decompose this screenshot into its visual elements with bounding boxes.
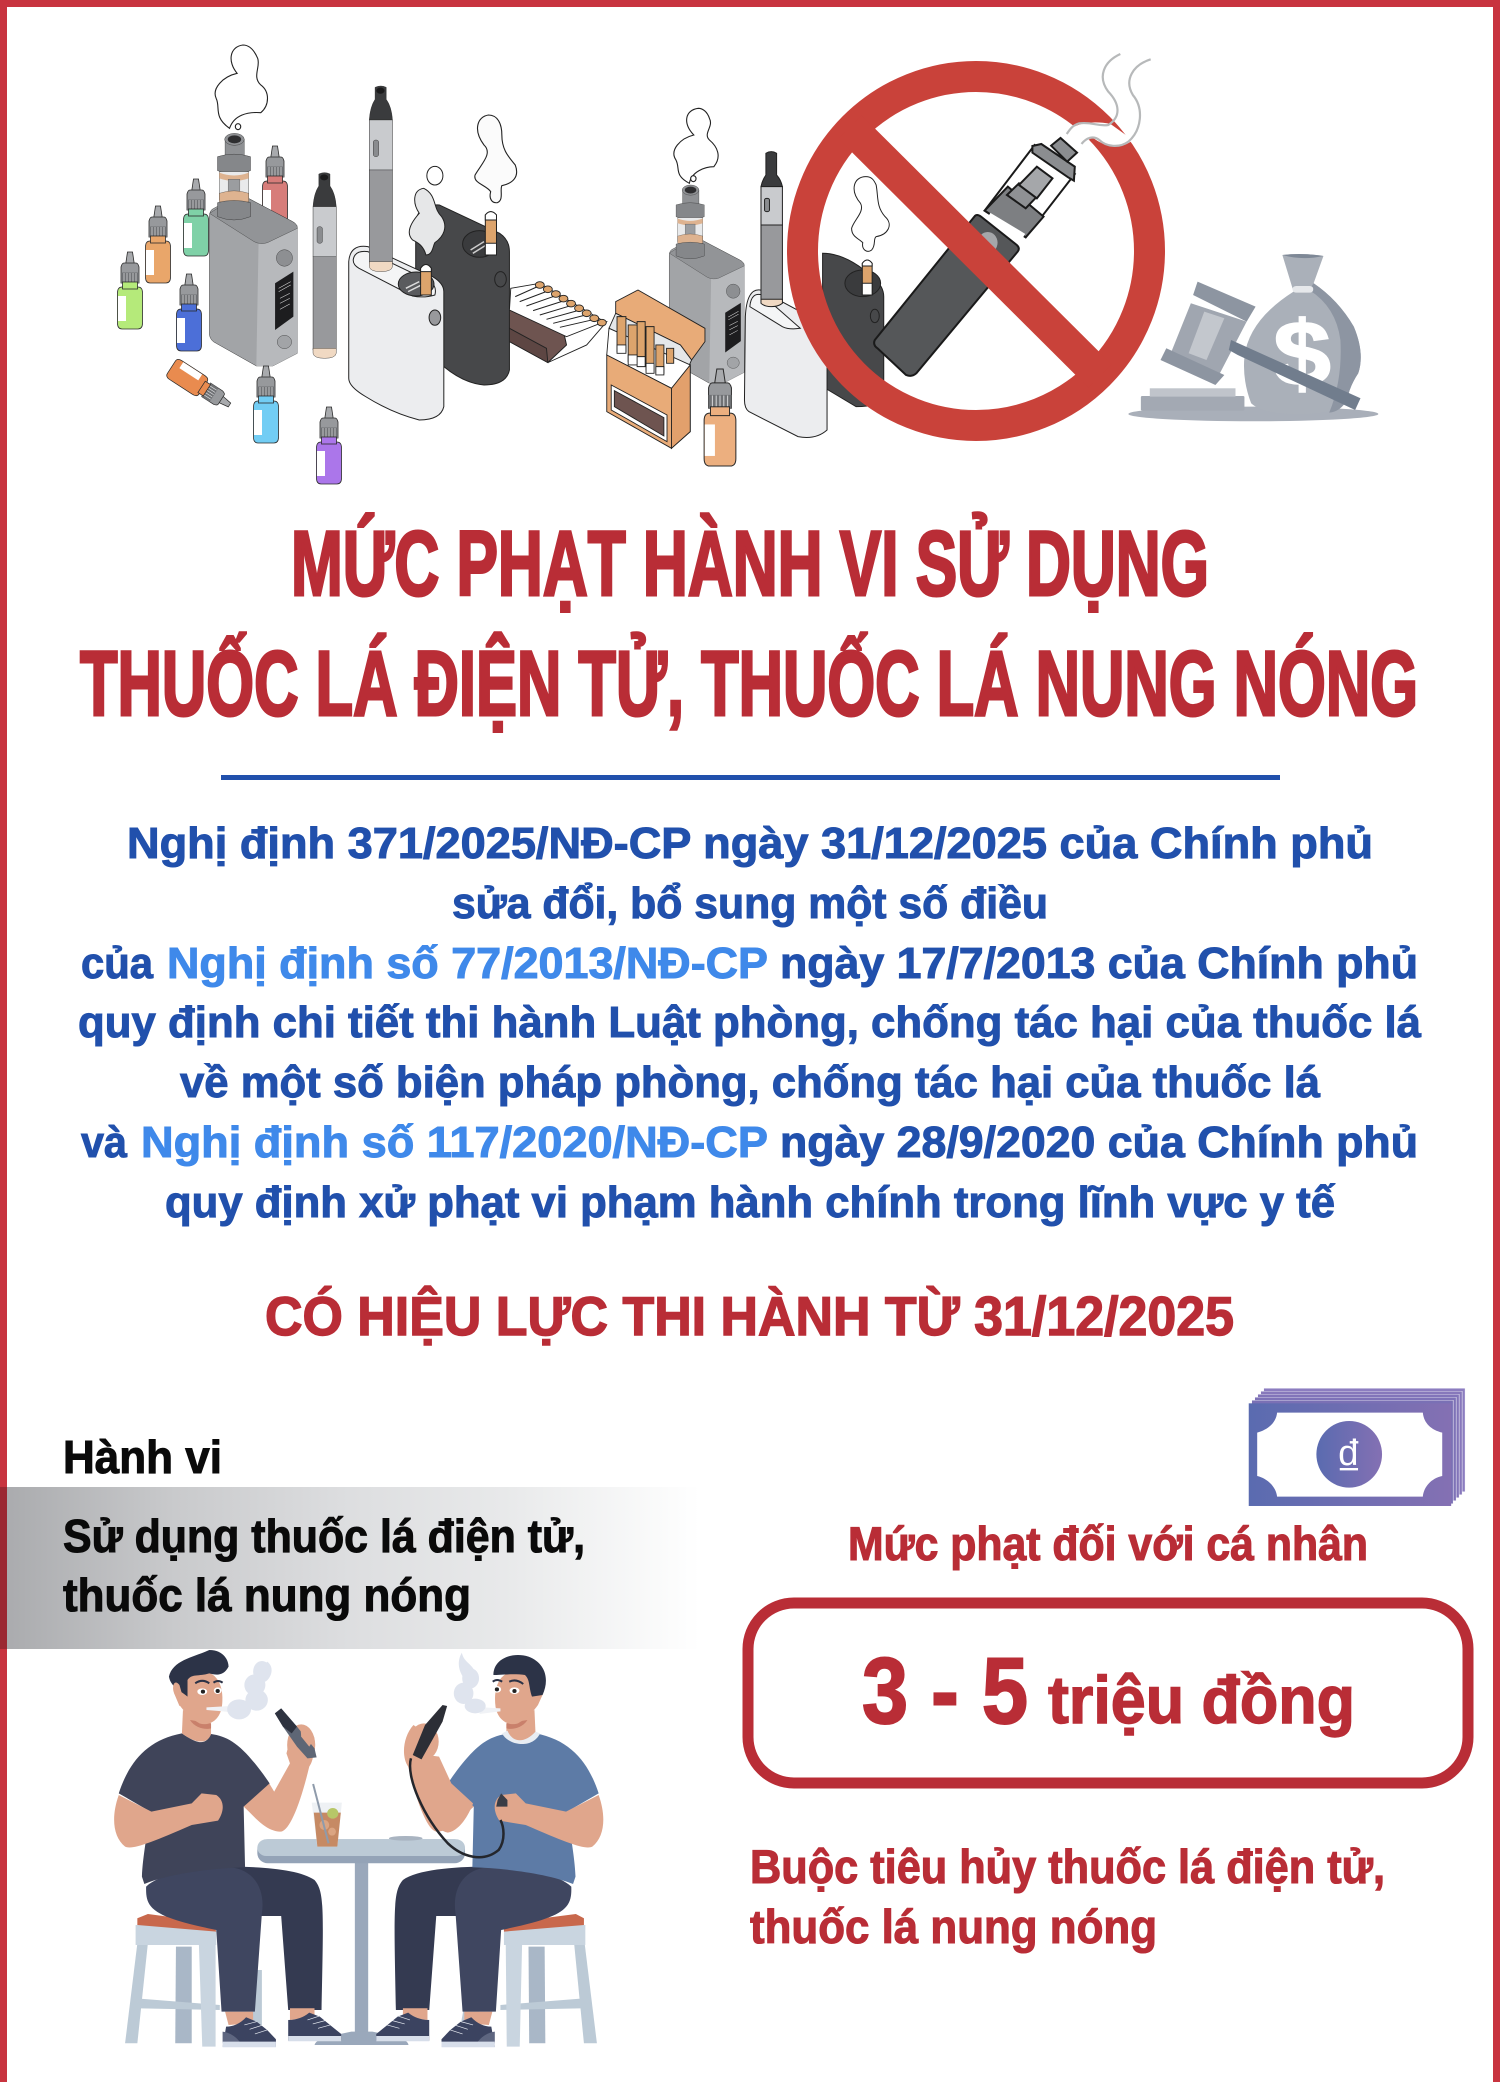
icon: right stool <box>460 1914 597 2047</box>
text block: remedial measure <box>750 1840 1385 1953</box>
icon: second vape mod <box>669 185 744 383</box>
icon: drink glass <box>312 1784 342 1847</box>
icon: back e-liquid bottles <box>118 146 288 414</box>
callout: fine amount: 3 - 5 <box>862 1638 1028 1743</box>
icon: table <box>257 1836 465 2045</box>
icon: prohibition sign <box>802 76 1150 426</box>
text block: decree description: Nghị định số 77/2013/NĐ-CP <box>167 939 768 988</box>
illustration: two men vaping at a table <box>114 1650 603 2047</box>
text block: decree description: Nghị định số 117/2020/NĐ-CP <box>141 1118 768 1167</box>
icon: banknote stack: ₫ <box>1336 1430 1362 1488</box>
text block: decree description: và <box>81 1118 127 1167</box>
icon: smoke puffs <box>215 45 718 203</box>
icon: open cigarette pack <box>607 290 705 448</box>
divider rule <box>221 775 1280 780</box>
panel: behaviour description band <box>0 1487 700 1649</box>
figure: left man <box>114 1650 341 2047</box>
smoke <box>206 1661 272 1719</box>
icon: loose cigarettes on box <box>509 282 607 363</box>
panel: behaviour description band: thuốc lá nung nóng <box>63 1569 471 1621</box>
icon: left stool <box>125 1914 262 2047</box>
text block: decree description: quy định chi tiết thi hành Luật phòng, chống tác hại của thuốc lá <box>78 998 1422 1047</box>
panel: behaviour description band: Sử dụng thuốc lá điện tử, <box>63 1510 585 1562</box>
text block: decree description <box>78 819 1422 1227</box>
heading: behaviour label: Hành vi <box>63 1431 222 1483</box>
effective date heading: CÓ HIỆU LỰC THI HÀNH TỪ 31/12/2025 <box>265 1285 1234 1347</box>
text block: decree description: ngày 17/7/2013 của Chính phủ <box>780 939 1418 988</box>
callout: fine amount: triệu đồng <box>1048 1663 1355 1738</box>
icon: front bottles <box>254 366 342 484</box>
text block: decree description: Nghị định 371/2025/NĐ-CP ngày 31/12/2025 của Chính phủ <box>127 819 1373 868</box>
icon: second vape pen and devices behind prohibition sign <box>744 152 889 437</box>
heading: fine for individuals: Mức phạt đối với cá nhân <box>848 1517 1368 1570</box>
text block: decree description: quy định xử phạt vi phạm hành chính trong lĩnh vực y tế <box>165 1178 1336 1227</box>
icon: vape mod box <box>209 133 297 366</box>
icon: vape pen <box>313 173 336 358</box>
text block: decree description: của <box>81 939 153 988</box>
icon: vape device under prohibition sign <box>874 138 1077 376</box>
smoke <box>454 1653 500 1714</box>
icon: vapor curls <box>1066 54 1151 146</box>
text block: decree description: về một số biện pháp phòng, chống tác hại của thuốc lá <box>180 1058 1321 1107</box>
dollar sign: $ <box>1273 303 1331 405</box>
icon: tan e-liquid bottle <box>704 369 736 466</box>
icon: dark heated tobacco device <box>409 166 509 385</box>
title <box>80 512 1418 735</box>
figure: right man <box>376 1653 603 2047</box>
icon: banknote stack <box>1249 1388 1465 1506</box>
text block: remedial measure: thuốc lá nung nóng <box>750 1900 1157 1953</box>
icon: gavel and money bag <box>1128 254 1378 421</box>
text block: remedial measure: Buộc tiêu hủy thuốc lá điện tử, <box>750 1840 1385 1893</box>
callout: fine amount <box>748 1603 1468 1783</box>
icon: white heated tobacco device with tall pen <box>349 86 444 420</box>
text block: decree description: sửa đổi, bổ sung một số điều <box>452 879 1048 928</box>
text block: decree description: ngày 28/9/2020 của Chính phủ <box>780 1118 1418 1167</box>
illustration: e-cigarette and heated tobacco products <box>118 45 744 484</box>
